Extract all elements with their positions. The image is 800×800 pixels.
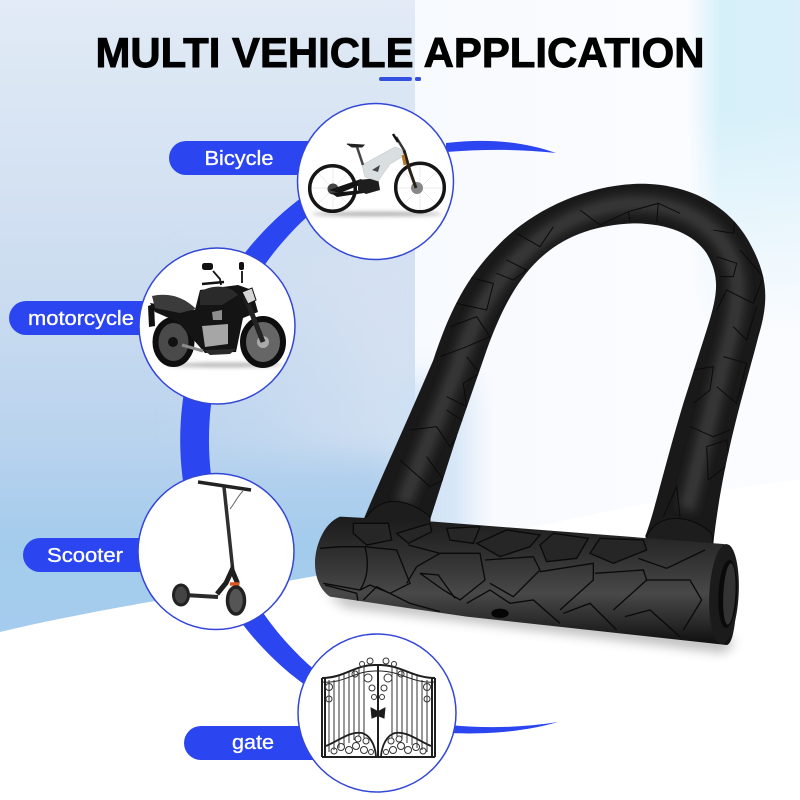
circle: gate [298,634,456,792]
key hole [491,609,509,618]
pill: gate: gate [232,732,274,754]
pill: motorcycle [9,301,169,335]
shackle texture [400,203,763,517]
end cap [707,543,741,645]
icon: motorcycle [148,262,283,367]
pill: Scooter [23,538,173,572]
pill: motorcycle: motorcycle [28,308,134,330]
u-lock [315,184,765,645]
pill: gate [184,726,344,760]
shackle [363,184,765,547]
icon: scooter [174,482,251,614]
lock shadow [325,592,735,652]
pill: Bicycle: Bicycle [204,148,274,170]
icon: bicycle [310,134,444,216]
circle: motorcycle [139,248,295,404]
connector arc [180,141,558,733]
crossbar [315,517,741,645]
shackle collars [363,502,430,523]
crossbar texture [320,523,705,637]
title: MULTI VEHICLE APPLICATION [96,29,704,76]
background [0,0,800,632]
title underline accent [379,77,421,81]
pill: Scooter: Scooter [47,545,123,567]
circle: scooter [138,474,294,630]
icon: gate [322,658,435,758]
circle: bicycle [298,104,454,260]
pill: Bicycle [169,141,329,175]
